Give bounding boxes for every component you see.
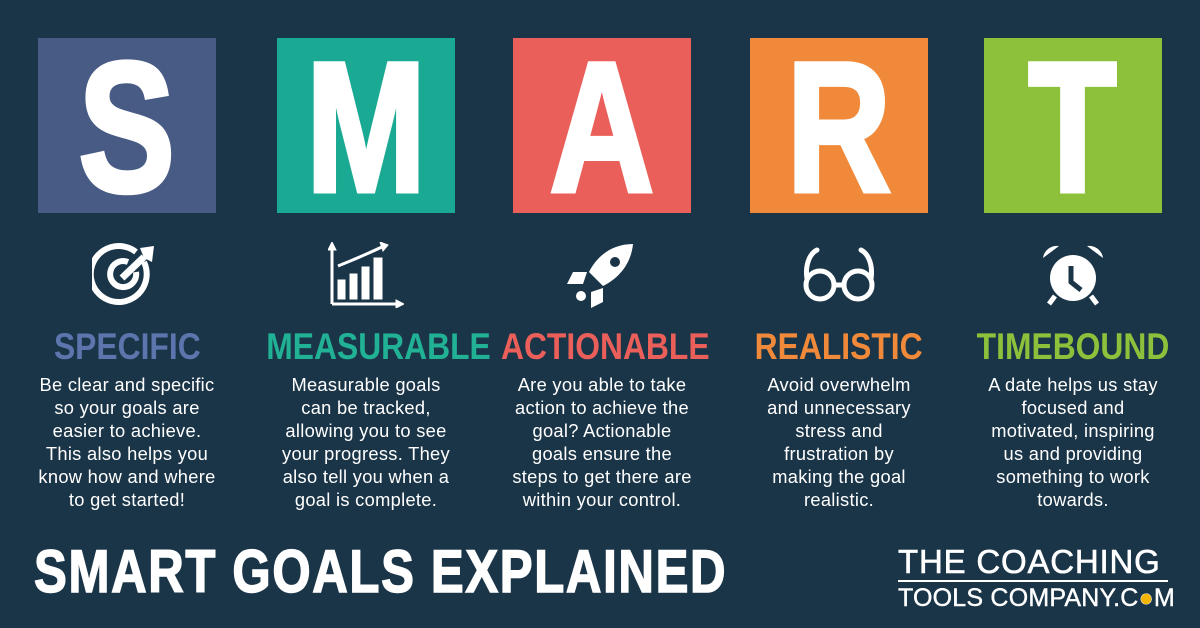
text: specific: [38, 374, 216, 510]
text: measurable: allowing you to see: [285, 420, 447, 441]
letter box S: S: [79, 25, 175, 231]
letter box T: T: [1029, 25, 1117, 231]
text: realistic: making the goal: [772, 466, 906, 487]
text: timebound: motivated, inspiring: [991, 420, 1155, 441]
text: realistic: stress and: [795, 420, 883, 441]
panel: specific: [38, 243, 216, 510]
text: actionable: action to achieve the: [515, 397, 689, 418]
text: specific: to get started!: [69, 489, 185, 510]
text: timebound: focused and: [1022, 397, 1124, 418]
heading: timebound: TIMEBOUND: [977, 326, 1169, 367]
icon: bar chart: [328, 242, 404, 308]
heading: specific: SPECIFIC: [54, 326, 200, 367]
text: specific: so your goals are: [54, 397, 200, 418]
text: realistic: Avoid overwhelm: [767, 374, 911, 395]
letter box A: A: [550, 25, 654, 231]
text: specific: This also helps you: [46, 443, 208, 464]
text: timebound: something to work: [996, 466, 1150, 487]
text: actionable: [512, 374, 692, 510]
text: timebound: [988, 374, 1158, 510]
letter box R: [750, 38, 928, 213]
icon: rocket: [567, 244, 633, 308]
text: measurable: can be tracked,: [301, 397, 431, 418]
panel: actionable: [501, 244, 710, 510]
text: actionable: goal? Actionable: [532, 420, 671, 441]
icon: target: [92, 243, 154, 305]
text: realistic: [767, 374, 911, 510]
text: actionable: within your control.: [523, 489, 681, 510]
panel: timebound: [977, 246, 1169, 510]
text: measurable: [282, 374, 450, 510]
letter box M: [277, 38, 455, 213]
text: actionable: Are you able to take: [518, 374, 686, 395]
text: measurable: also tell you when a: [283, 466, 449, 487]
panel: realistic: [755, 248, 923, 510]
text: specific: Be clear and specific: [40, 374, 214, 395]
panel: measurable: [266, 242, 491, 510]
heading: realistic: REALISTIC: [755, 326, 923, 367]
heading: actionable: ACTIONABLE: [501, 326, 710, 367]
letter box T: [984, 38, 1162, 213]
icon: alarm clock: [1043, 246, 1103, 306]
title: SMART GOALS EXPLAINED: [34, 538, 727, 605]
text: timebound: us and providing: [1004, 443, 1142, 464]
text: realistic: realistic.: [804, 489, 874, 510]
text: measurable: your progress. They: [282, 443, 450, 464]
heading: measurable: MEASURABLE: [266, 326, 491, 367]
text: timebound: towards.: [1037, 489, 1109, 510]
text: specific: easier to achieve.: [53, 420, 201, 441]
letter box M: M: [306, 25, 426, 231]
logo: THE COACHING: [898, 543, 1161, 580]
icon: glasses: [804, 248, 874, 302]
text: actionable: steps to get there are: [512, 466, 692, 487]
text: measurable: goal is complete.: [295, 489, 437, 510]
letter box S: [38, 38, 216, 213]
letter box R: R: [787, 25, 891, 231]
text: timebound: A date helps us stay: [988, 374, 1158, 395]
text: actionable: goals ensure the: [532, 443, 672, 464]
text: realistic: and unnecessary: [767, 397, 911, 418]
text: measurable: Measurable goals: [291, 374, 441, 395]
logo: [898, 543, 1175, 612]
letter box A: [513, 38, 691, 213]
text: realistic: frustration by: [784, 443, 894, 464]
text: specific: know how and where: [38, 466, 216, 487]
logo: TOOLS COMPANY.C●M: [898, 584, 1175, 612]
